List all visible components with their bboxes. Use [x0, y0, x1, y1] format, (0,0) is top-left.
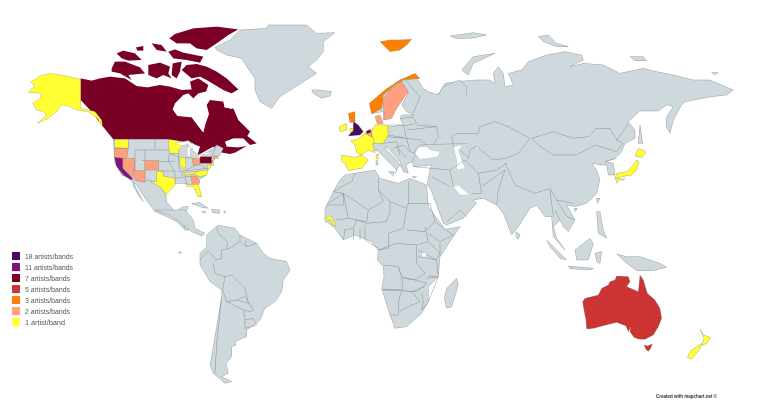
legend: 7 artists/bands: 7 artists/bands — [25, 274, 70, 283]
senegal — [325, 216, 336, 226]
black sea — [415, 147, 440, 159]
legend — [12, 252, 73, 327]
new zealand south island — [687, 343, 702, 359]
land — [325, 170, 460, 328]
africa — [325, 170, 460, 328]
legend: 1 artist/band: 1 artist/band — [25, 318, 65, 327]
borders — [413, 122, 628, 222]
usa, mexico and central america — [113, 139, 226, 230]
south america — [155, 210, 290, 383]
legend: 11 artists/bands: 11 artists/bands — [25, 263, 73, 272]
japan — [615, 148, 646, 183]
canada — [81, 27, 257, 155]
legend: 5 artists/bands: 5 artists/bands — [25, 285, 70, 294]
lake victoria — [422, 253, 426, 257]
borders — [200, 227, 257, 373]
land — [155, 210, 290, 383]
colored states — [114, 139, 218, 197]
tasmania — [644, 344, 652, 351]
borders — [327, 173, 453, 315]
alaska — [28, 73, 103, 127]
legend: 3 artists/bands: 3 artists/bands — [25, 296, 70, 305]
seam patch between europe and asia — [417, 95, 470, 143]
legend: 18 artists/bands: 18 artists/bands — [25, 252, 73, 261]
great lakes — [175, 141, 211, 159]
greenland and iceland — [215, 25, 335, 108]
borders — [383, 80, 438, 158]
state and country lines — [128, 139, 217, 228]
australia — [583, 275, 662, 339]
australia and new zealand — [583, 275, 711, 359]
legend: 2 artists/bands: 2 artists/bands — [25, 307, 70, 316]
asia land — [412, 33, 733, 271]
colored countries — [339, 39, 420, 171]
caspian and gulf — [453, 145, 479, 195]
credit: Created with mapchart.net © — [656, 393, 717, 400]
europe borders and colored countries — [339, 39, 438, 171]
north america — [28, 25, 335, 230]
new zealand north island — [700, 329, 711, 346]
land — [365, 75, 467, 178]
land: lower states, mexico, caribbean — [113, 139, 226, 230]
asia borders and japan — [413, 122, 646, 222]
europe — [365, 75, 467, 178]
